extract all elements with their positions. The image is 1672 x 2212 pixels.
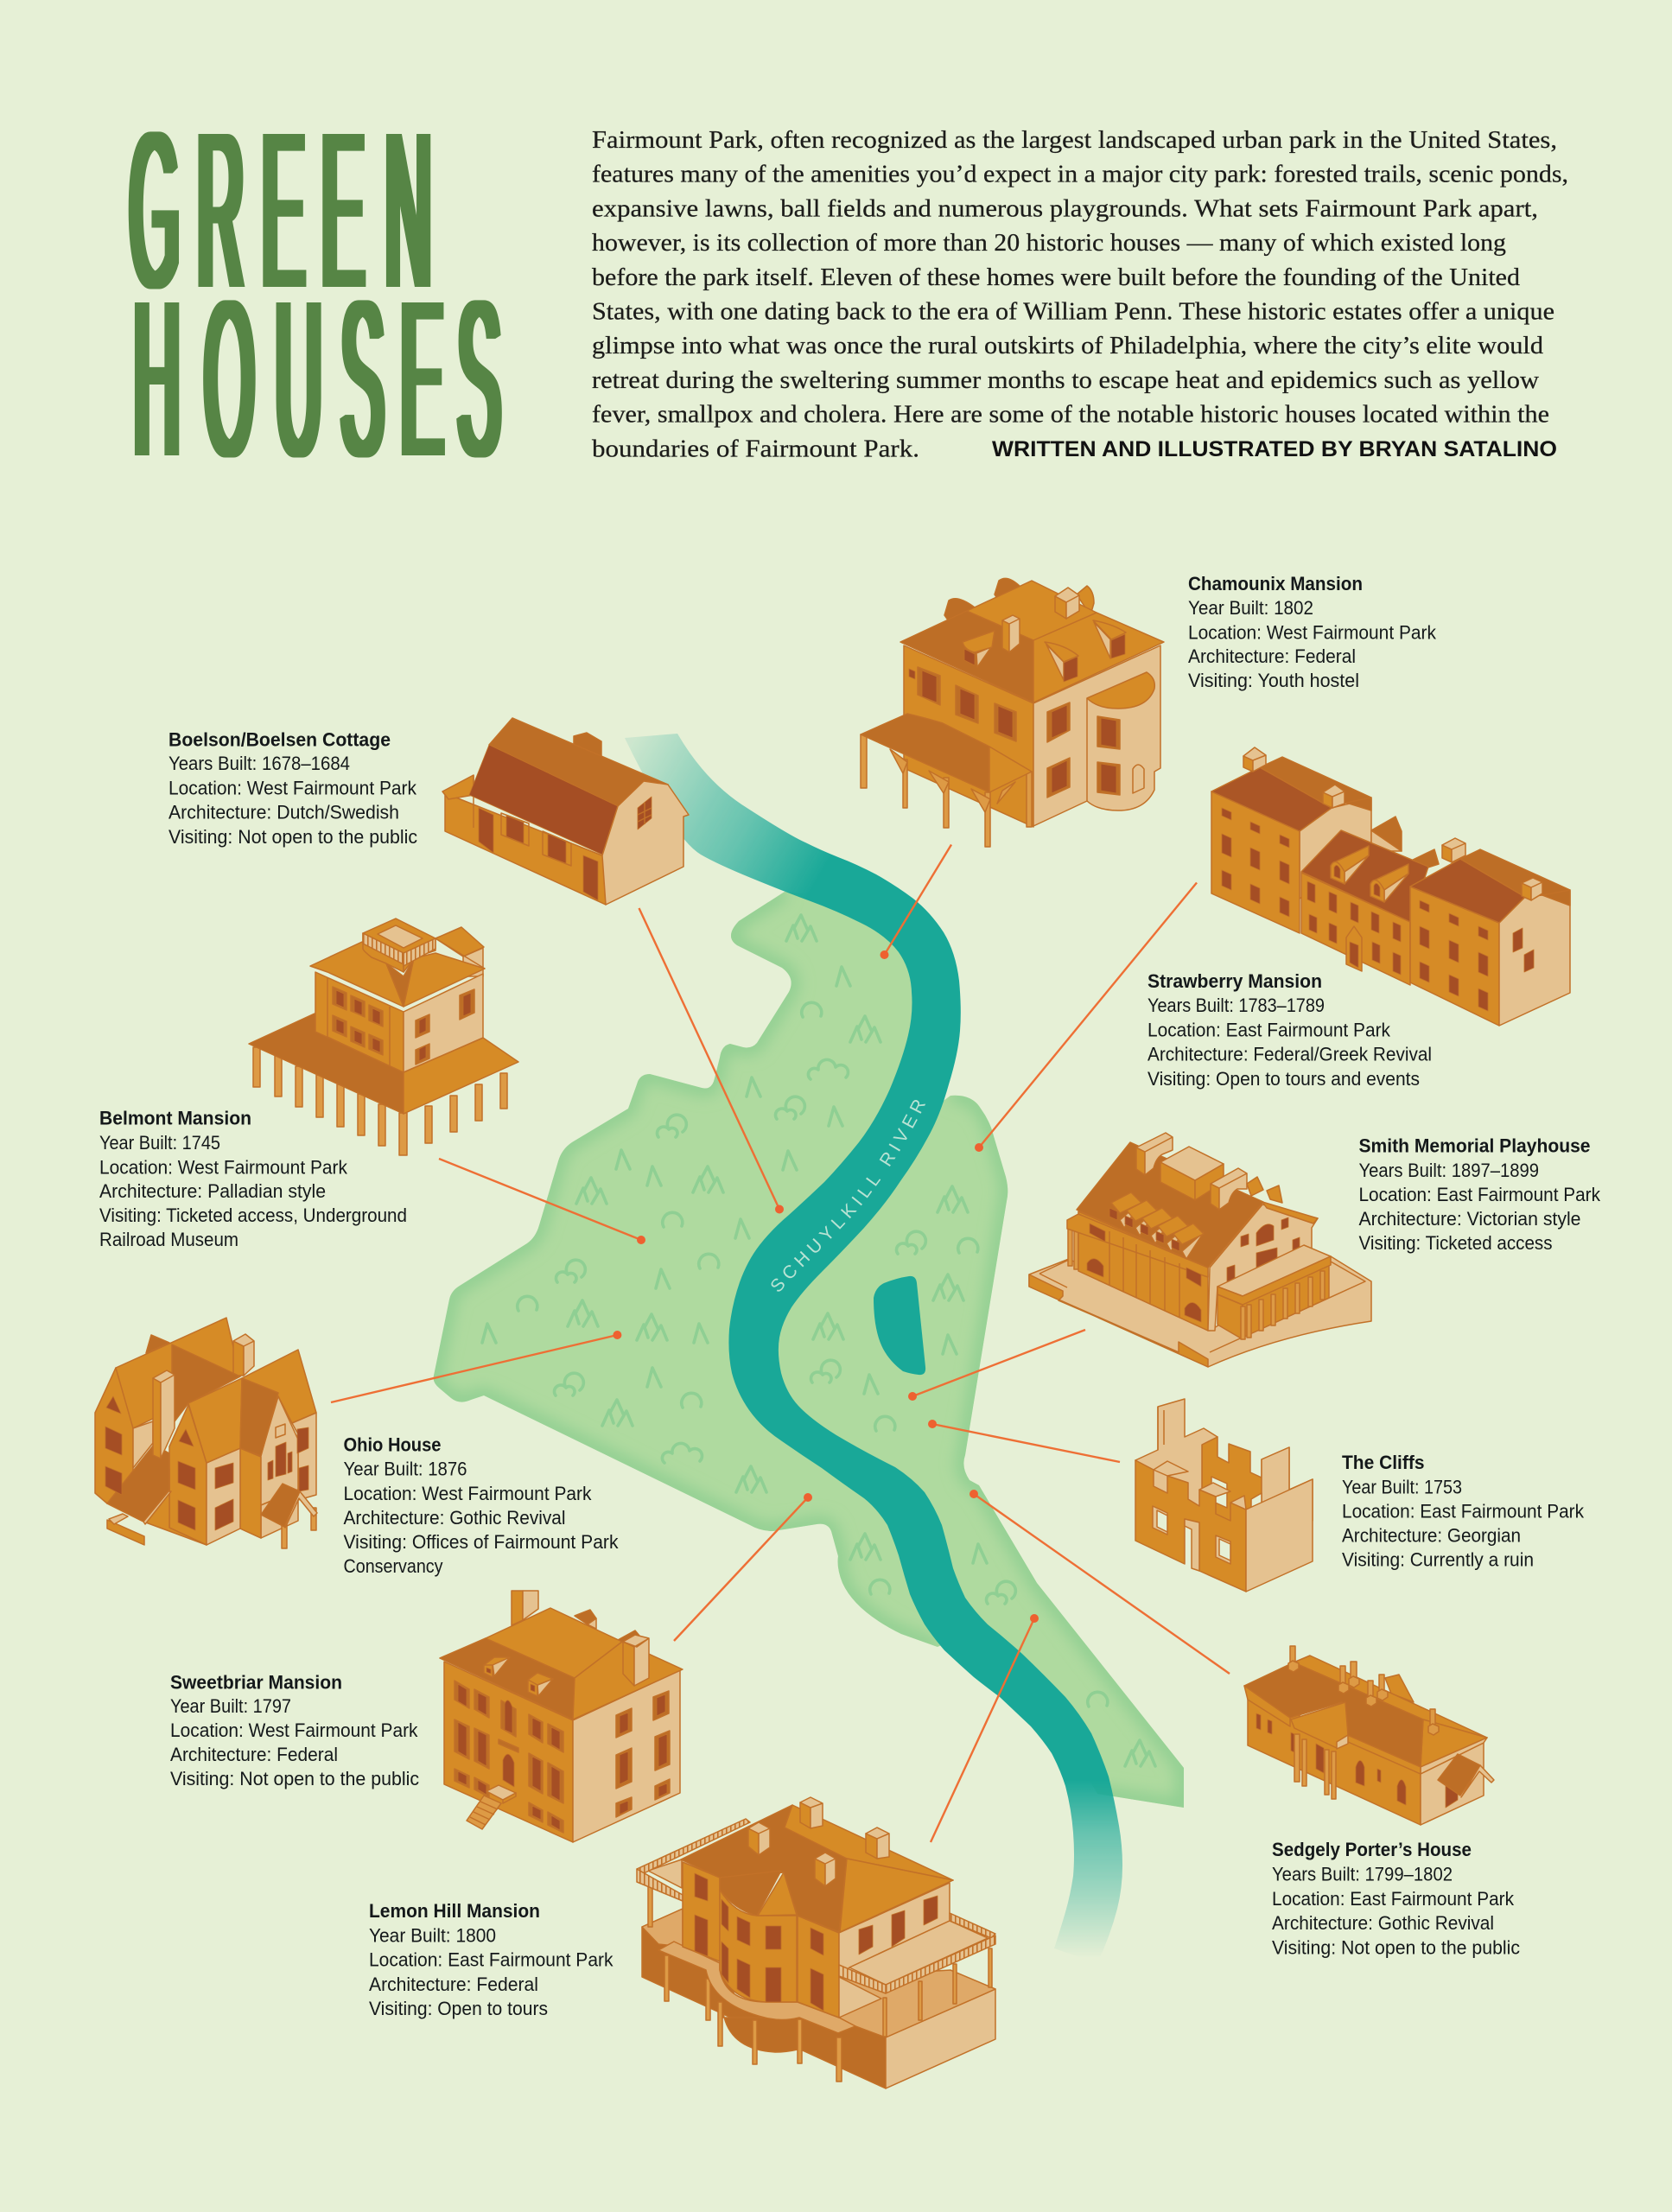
caption: Strawberry Mansion: Architecture: Federal/Greek Revival	[1148, 1044, 1432, 1065]
caption: Belmont Mansion: Belmont Mansion	[99, 1108, 251, 1128]
caption: Ohio House: Year Built: 1876	[344, 1459, 467, 1479]
intro text block: Fairmount Park, often recognized as the largest landscaped urban park in the United States,	[592, 126, 1557, 154]
intro text block: features many of the amenities you’d expect in a major city park: forested trails, scenic ponds,	[592, 161, 1568, 188]
caption: Chamounix Mansion: Architecture: Federal	[1188, 645, 1356, 667]
caption: Smith Memorial Playhouse: Smith Memorial Playhouse	[1358, 1135, 1590, 1156]
illustration: Belmont Mansion	[249, 918, 518, 1155]
map: Fairmount Park land	[415, 864, 1192, 1823]
illustration: Strawberry Mansion	[1211, 747, 1570, 1026]
caption: Belmont Mansion: Architecture: Palladian style	[99, 1180, 326, 1202]
map: pond	[874, 1276, 925, 1375]
caption: Belmont Mansion	[99, 1108, 407, 1250]
caption: Chamounix Mansion: Chamounix Mansion	[1188, 573, 1363, 594]
caption: Belmont Mansion: Visiting: Ticketed access, Underground	[99, 1205, 407, 1226]
caption: Sedgely Porter's House: Architecture: Gothic Revival	[1272, 1912, 1494, 1934]
title	[130, 87, 500, 504]
caption: Boelson/Boelsen Cottage	[168, 729, 417, 848]
caption: Lemon Hill Mansion: Architecture: Federal	[369, 1974, 538, 1995]
caption: Ohio House: Visiting: Offices of Fairmount Park	[344, 1531, 619, 1553]
caption: Ohio House: Conservancy	[344, 1555, 442, 1577]
intro text block: expansive lawns, ball fields and numerous playgrounds. What sets Fairmount Park apart,	[592, 194, 1538, 222]
illustration: Sedgely Porter's House	[1244, 1646, 1494, 1825]
caption: The Cliffs: Visiting: Currently a ruin	[1342, 1548, 1534, 1571]
caption: The Cliffs: Location: East Fairmount Park	[1342, 1500, 1585, 1522]
caption: Strawberry Mansion	[1148, 970, 1432, 1090]
caption: Boelson/Boelsen Cottage: Architecture: Dutch/Swedish	[168, 802, 399, 823]
caption: Ohio House: Ohio House	[344, 1434, 441, 1455]
caption: Sedgely Porter's House	[1272, 1839, 1520, 1958]
map: tree and shrub marks	[482, 915, 1155, 1766]
caption: Boelson/Boelsen Cottage: Visiting: Not open to the public	[168, 826, 417, 848]
caption: Belmont Mansion: Location: West Fairmount Park	[99, 1156, 348, 1179]
caption: Sweetbriar Mansion: Sweetbriar Mansion	[170, 1671, 342, 1694]
caption: Ohio House: Location: West Fairmount Park	[344, 1483, 592, 1504]
caption: Smith Memorial Playhouse: Location: East Fairmount Park	[1358, 1184, 1601, 1205]
intro text block	[592, 126, 1568, 462]
caption: Belmont Mansion: Year Built: 1745	[99, 1132, 220, 1154]
caption: Belmont Mansion: Railroad Museum	[99, 1229, 238, 1250]
illustration: Ohio House	[95, 1318, 317, 1548]
caption: The Cliffs	[1342, 1452, 1585, 1571]
caption: Lemon Hill Mansion: Visiting: Open to tours	[369, 1998, 548, 2019]
caption: Lemon Hill Mansion: Lemon Hill Mansion	[369, 1900, 540, 1922]
intro text block: fever, smallpox and cholera. Here are some of the notable historic houses located within the	[592, 401, 1549, 429]
caption: Strawberry Mansion: Visiting: Open to tours and events	[1148, 1068, 1420, 1090]
intro text block: States, with one dating back to the era of William Penn. These historic estates offer a unique	[592, 297, 1554, 325]
caption: The Cliffs: Architecture: Georgian	[1342, 1524, 1521, 1547]
illustration: Lemon Hill Mansion	[637, 1797, 995, 2088]
caption: Lemon Hill Mansion: Year Built: 1800	[369, 1925, 496, 1946]
caption: Chamounix Mansion	[1188, 573, 1437, 691]
leader lines	[331, 845, 1230, 1842]
caption: Sweetbriar Mansion	[170, 1671, 419, 1789]
caption: Sweetbriar Mansion: Year Built: 1797	[170, 1695, 291, 1717]
caption: Sedgely Porter's House: Sedgely Porter’s House	[1272, 1839, 1472, 1860]
caption: Sedgely Porter's House: Location: East Fairmount Park	[1272, 1888, 1515, 1910]
caption: Lemon Hill Mansion: Location: East Fairmount Park	[369, 1949, 613, 1970]
intro text block: however, is its collection of more than 20 historic houses — many of which existed long	[592, 229, 1506, 257]
caption: Sweetbriar Mansion: Visiting: Not open to the public	[170, 1768, 419, 1789]
illustration: Smith Memorial Playhouse	[1029, 1133, 1371, 1367]
caption: Strawberry Mansion: Years Built: 1783–1789	[1148, 995, 1325, 1016]
map: Schuylkill River	[625, 734, 1122, 1963]
title: GREEN	[130, 87, 431, 335]
caption: Sweetbriar Mansion: Architecture: Federal	[170, 1744, 338, 1765]
illustration: The Cliffs	[1135, 1399, 1313, 1592]
illustration: Boelson/Boelsen Cottage	[442, 718, 689, 905]
caption: Lemon Hill Mansion	[369, 1900, 613, 2019]
title: HOUSES	[134, 256, 500, 504]
caption: Smith Memorial Playhouse: Architecture: Victorian style	[1358, 1208, 1581, 1230]
caption: Sedgely Porter's House: Visiting: Not open to the public	[1272, 1937, 1520, 1958]
caption: Chamounix Mansion: Visiting: Youth hostel	[1188, 670, 1359, 691]
intro text block: boundaries of Fairmount Park.	[592, 435, 919, 462]
caption: Boelson/Boelsen Cottage: Location: West Fairmount Park	[168, 778, 417, 798]
caption: Smith Memorial Playhouse: Years Built: 1897–1899	[1358, 1160, 1539, 1181]
caption: The Cliffs: Year Built: 1753	[1342, 1476, 1462, 1498]
intro text block: glimpse into what was once the rural outskirts of Philadelphia, where the city’s elite would	[592, 332, 1544, 359]
illustration: Chamounix Mansion	[861, 578, 1164, 847]
caption: Strawberry Mansion: Location: East Fairmount Park	[1148, 1020, 1391, 1040]
caption: Boelson/Boelsen Cottage: Years Built: 1678–1684	[168, 753, 350, 774]
caption: Boelson/Boelsen Cottage: Boelson/Boelsen Cottage	[168, 729, 391, 750]
illustration: Sweetbriar Mansion	[440, 1591, 683, 1842]
caption: Ohio House	[344, 1434, 619, 1577]
caption: Sweetbriar Mansion: Location: West Fairmount Park	[170, 1719, 418, 1741]
caption: Sedgely Porter's House: Years Built: 1799–1802	[1272, 1863, 1453, 1885]
river label: SCHUYLKILL RIVER	[771, 1100, 926, 1292]
caption: Chamounix Mansion: Year Built: 1802	[1188, 597, 1313, 619]
caption: Smith Memorial Playhouse: Visiting: Ticketed access	[1358, 1232, 1552, 1254]
caption: Smith Memorial Playhouse	[1358, 1135, 1601, 1254]
intro text block: retreat during the sweltering summer months to escape heat and epidemics such as yellow	[592, 366, 1539, 394]
caption: Strawberry Mansion: Strawberry Mansion	[1148, 970, 1322, 992]
intro text block: before the park itself. Eleven of these homes were built before the founding of the United	[592, 264, 1521, 291]
byline: WRITTEN AND ILLUSTRATED BY BRYAN SATALINO	[992, 437, 1557, 461]
caption: Ohio House: Architecture: Gothic Revival	[344, 1507, 565, 1529]
caption: The Cliffs: The Cliffs	[1342, 1452, 1424, 1473]
caption: Chamounix Mansion: Location: West Fairmount Park	[1188, 622, 1437, 643]
